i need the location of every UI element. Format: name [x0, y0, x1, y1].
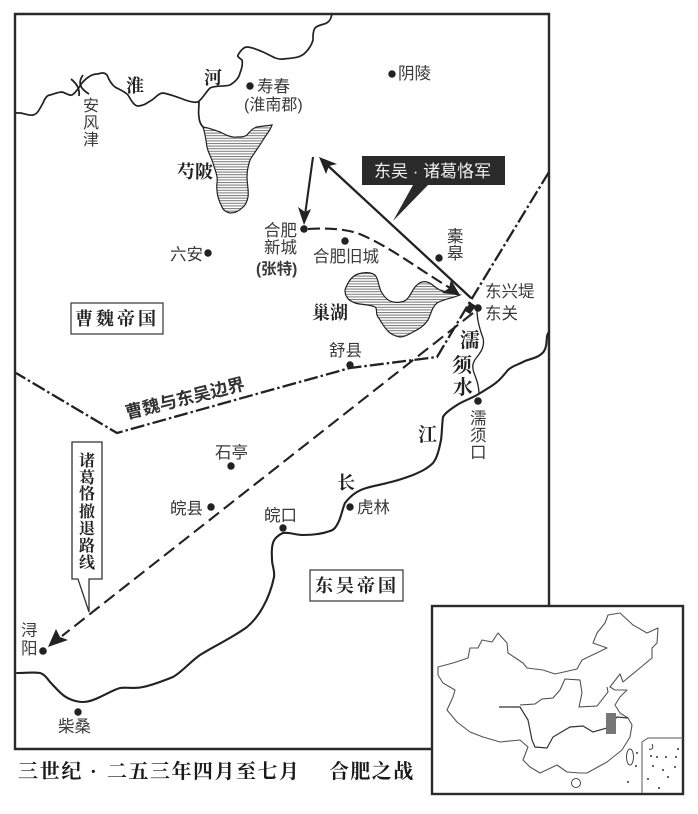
place: Wanxian: 皖县: [170, 499, 203, 518]
label: He: 河: [204, 68, 222, 88]
place: Tuogao: 皋: [447, 244, 464, 263]
label: Ruxu water: 水: [453, 376, 473, 399]
label: border: 曹魏与东吴边界: [123, 374, 247, 423]
place: Hulin: 虎林: [357, 498, 390, 517]
title: 合肥之战: [329, 760, 415, 783]
place: Wankou: 皖口: [264, 506, 297, 525]
place: Xunyang: 浔: [21, 621, 38, 640]
callout: retreat route: 退: [79, 520, 95, 538]
label: Eastern Wu empire: 东吴帝国: [315, 575, 399, 596]
place: Wanxian: [170, 499, 215, 518]
place: Tuogao: [435, 227, 464, 263]
place: Hefei old city: [313, 237, 379, 266]
solid arrow to Hefei new city: [298, 157, 313, 225]
place: Chaisang: 柴桑: [58, 717, 91, 736]
place: Shouchun: 寿春: [257, 77, 290, 96]
title: 二五三年四月至七月: [107, 759, 300, 783]
label: Huai river: 淮: [126, 76, 144, 96]
river from Huai to Quebei lake: [199, 102, 203, 127]
place: Hefei new city: 合肥: [264, 221, 297, 240]
Yangtze river: [17, 332, 549, 702]
callout: retreat route: 葛: [79, 469, 95, 487]
dashed arrow: attack on Hefei new city: [308, 229, 460, 295]
place: Hefei new city: 新城: [264, 238, 297, 257]
place: Dongxing dyke: 东兴堤: [485, 282, 535, 301]
label: Eastern Wu empire: [310, 570, 403, 601]
South China Sea box: [627, 738, 683, 793]
place: Ruxu mouth: 须: [470, 426, 486, 445]
Huai river: [16, 14, 332, 115]
place: Ruxu mouth: 口: [470, 444, 486, 462]
label: Chang: 长: [337, 473, 355, 493]
place: Anfeng ford: 津: [83, 131, 99, 149]
callout: Wu army: 东吴 · 诸葛恪军: [374, 162, 491, 181]
place: Shouchun: (淮南郡): [244, 96, 303, 114]
Taiwan: [626, 749, 634, 765]
place: Anfeng ford: 安: [83, 97, 99, 115]
place: Anfeng ford: 风: [83, 115, 99, 132]
title: 三世纪: [18, 760, 83, 783]
label: Jiang: 江: [418, 424, 437, 446]
label: Cao Wei empire: [71, 303, 163, 334]
callout: retreat route: 线: [79, 554, 95, 572]
callout: Wu army: [362, 156, 505, 221]
callout: retreat route: 路: [79, 537, 95, 555]
label: Cao Wei empire: 曹魏帝国: [75, 308, 159, 329]
place: Hefei new city: (张特): [256, 259, 297, 278]
Dongxing dyke mark: [465, 302, 476, 314]
map frame: [15, 14, 549, 749]
Anfeng ford symbol: [71, 75, 89, 96]
title: ·: [90, 761, 97, 783]
label: Quebei: 芍陂: [177, 161, 213, 182]
place: Hefei old city: 合肥旧城: [313, 247, 379, 266]
place: Shuxian: 舒县: [329, 341, 362, 360]
Wei-Wu border: [16, 172, 549, 433]
label: Ruxu water: 须: [452, 354, 473, 377]
callout: retreat route: 撤: [79, 502, 95, 521]
highlighted region: [606, 713, 616, 734]
place: Tuogao: 橐: [447, 227, 464, 246]
callout: retreat route: [72, 442, 102, 612]
place: Shiting: [215, 443, 248, 470]
place: Shiting: 石亭: [215, 443, 248, 462]
place: Xunyang: 阳: [21, 639, 38, 658]
place: Chaisang: [58, 708, 91, 736]
Ruxu river: [473, 310, 484, 394]
callout: retreat route: 诸: [79, 451, 95, 470]
Quebei lake: [203, 125, 272, 213]
place: Shuxian: [329, 341, 362, 369]
Chao lake: [345, 273, 460, 337]
place: Hefei new city: [256, 221, 308, 278]
place: Shouchun: [244, 77, 303, 114]
place: Dongguan: 东关: [485, 304, 518, 323]
solid arrow: Wu army advance: [319, 157, 471, 298]
title: [18, 759, 415, 783]
label: Ruxu water: 濡: [460, 328, 480, 352]
place: Ruxu mouth: [470, 397, 486, 462]
Yangtze River: [499, 707, 628, 748]
place: Xunyang: [21, 621, 47, 658]
inset map of China: [432, 606, 683, 794]
callout: retreat route: 恪: [79, 484, 95, 503]
China outline: [438, 613, 658, 773]
Yellow River: [520, 679, 608, 707]
place: Yinling: 阴陵: [398, 64, 431, 83]
place: Lu'an: 六安: [170, 245, 203, 264]
label: Chao lake: 巢湖: [312, 303, 348, 323]
place: Ruxu mouth: 濡: [470, 409, 486, 428]
dashed arrow: retreat route: [48, 313, 473, 647]
Hainan: [572, 778, 580, 788]
